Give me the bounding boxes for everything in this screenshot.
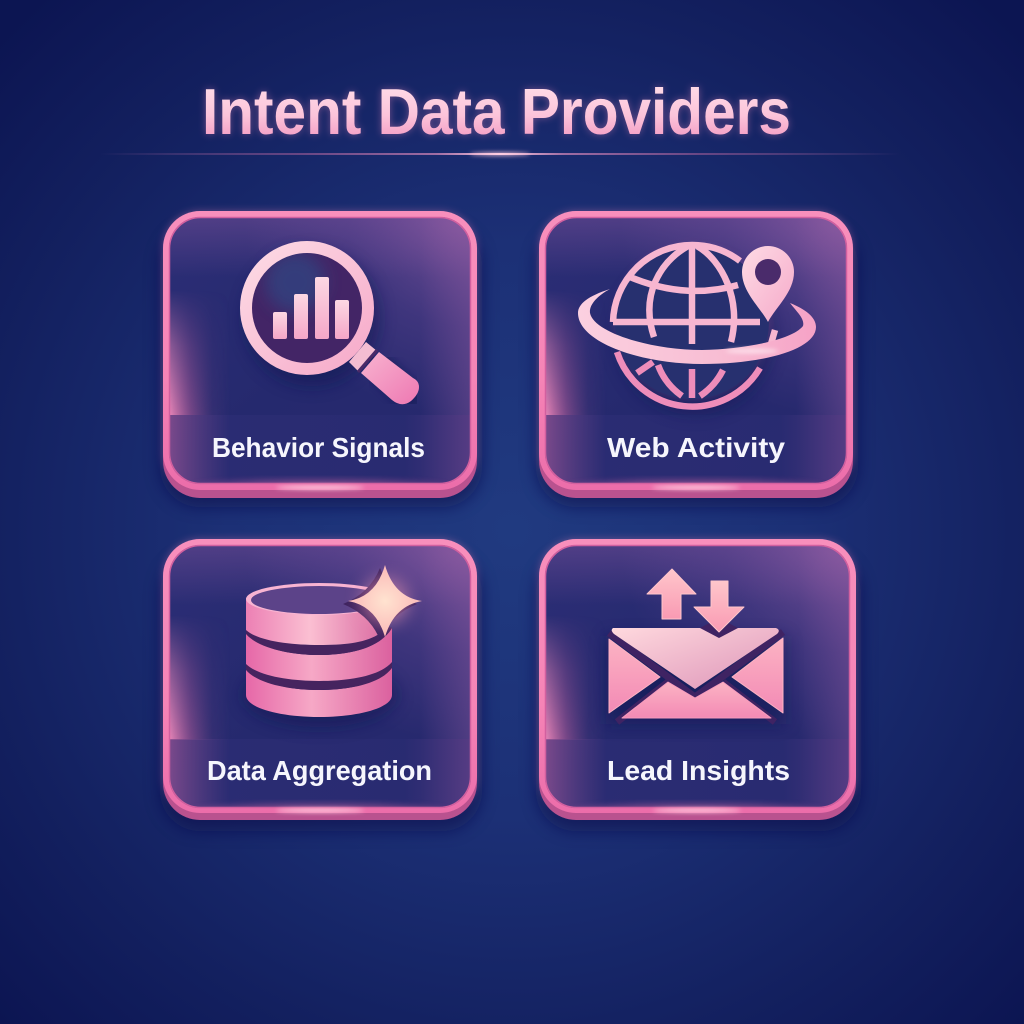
icon: globe with orbit ring and location pin <box>578 244 816 415</box>
icon: magnifying glass with bar chart <box>244 247 419 404</box>
icon: envelope with up and down arrows <box>606 569 786 724</box>
panel: lead insights <box>536 539 861 831</box>
label: Web Activity <box>607 432 785 463</box>
panel: data aggregation <box>160 539 482 831</box>
label: Behavior Signals <box>212 432 425 463</box>
title: Intent Data Providers <box>202 75 791 148</box>
title: Intent Data Providers <box>202 75 791 148</box>
title underline <box>100 152 900 156</box>
label: Data Aggregation <box>207 755 432 786</box>
icon: database stack with sparkle <box>242 565 422 727</box>
panel: web activity <box>536 211 858 507</box>
label: Lead Insights <box>607 755 790 786</box>
panel: behavior signals <box>160 211 482 507</box>
